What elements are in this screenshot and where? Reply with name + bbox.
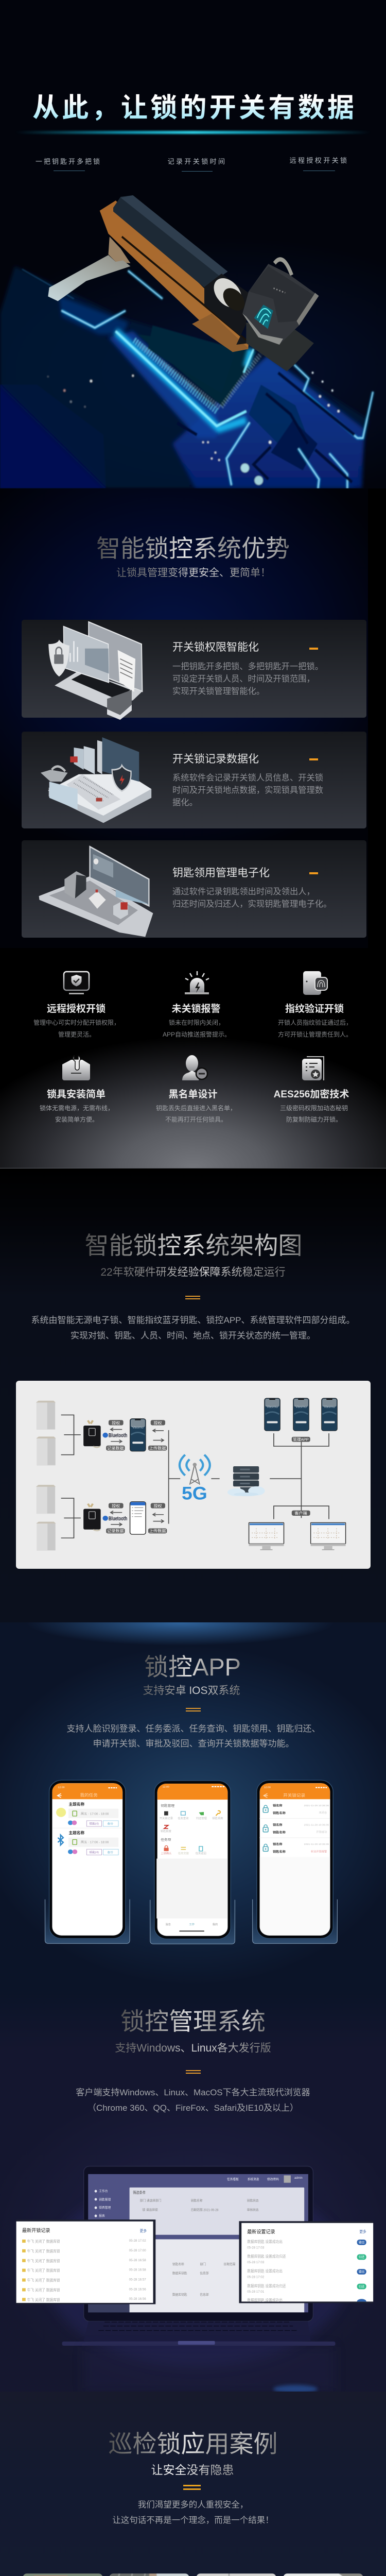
- card: latest settings records: 输出: [359, 2270, 364, 2274]
- phone: lock records: 钥匙名称: [273, 1831, 286, 1834]
- photo: Zhengzhou railway fence: [110, 2573, 189, 2576]
- upload link 1: [148, 1420, 167, 1451]
- feature title 2: 未关锁报警: [171, 1004, 221, 1014]
- bracket lines: [61, 1415, 329, 1538]
- phone: my tasks: 周五 · 17:00 - 18:00: [81, 1812, 109, 1816]
- card description: [172, 773, 323, 807]
- upload link 2: 上传数据: [149, 1528, 166, 1533]
- card: latest unlock records: [16, 2219, 155, 2304]
- phone: workbench: 钥匙管理: [161, 1803, 175, 1808]
- phone: lock records: 2021-11-29 10:36:36: [304, 1804, 329, 1807]
- cases description: 我们渴望更多的人重视安全，: [138, 2500, 248, 2510]
- icon: toolbox with wrench: [62, 1056, 90, 1080]
- phone: lock records: 2021-11-29 10:36:36: [304, 1843, 329, 1846]
- architecture description: 系统由智能无源电子锁、智能指纹蓝牙钥匙、锁控APP、系统管理软件四部分组成。: [31, 1315, 355, 1325]
- phone: my tasks: 12:00: [58, 1786, 65, 1789]
- card description: 系统软件会记录开关锁人员信息、开关锁: [172, 773, 323, 783]
- app phone 2: [130, 1502, 146, 1534]
- feature text 2: [163, 1019, 231, 1038]
- feature text 2: 锁未在时限内关闭，: [169, 1019, 224, 1026]
- phone: my tasks: 周五 · 17:00 - 18:00: [81, 1841, 109, 1844]
- phone: workbench: 任务返回: [196, 1852, 206, 1855]
- hero title: 从此，让锁的开关有数据: [32, 93, 357, 123]
- feature text 4: [40, 1105, 114, 1123]
- architecture diagram: [36, 1398, 346, 1551]
- icon: monitor with shield: [64, 972, 89, 994]
- section subtitle: advantages: 让锁具管理变得更安全、更简单！: [116, 567, 271, 579]
- bluetooth link 1: 记录数据: [107, 1446, 124, 1450]
- phone: my tasks: 备份: [108, 1850, 113, 1854]
- phone: workbench: 12:00: [163, 1786, 169, 1789]
- phone: lock records: 2021-11-29 10:36:36: [304, 1823, 329, 1826]
- card description: 通过软件记录钥匙领出时间及领出人，: [172, 887, 315, 896]
- card: latest unlock records: 05-28 17:00: [129, 2249, 146, 2252]
- hero glow divider: [15, 131, 371, 134]
- fingerprint bluetooth key: [242, 259, 319, 371]
- bluetooth link 2: Bluetooth: [109, 1516, 127, 1522]
- card: latest unlock records: 牛飞 关闭了 数据库锁: [27, 2297, 60, 2302]
- section subtitle: app: 支持安卓 IOS双系统: [143, 1685, 240, 1697]
- feature text 6: [280, 1105, 348, 1123]
- feature label 3: 远程授权开关锁: [290, 157, 348, 164]
- card: latest settings records: 05-28 17:03: [247, 2261, 265, 2264]
- card: latest settings records: 最新设置记录: [247, 2229, 275, 2234]
- illustration: laptop with shield: [48, 622, 142, 720]
- card: record digitisation: [22, 732, 366, 828]
- card description: 可设定开关锁人员、时间及开锁范围，: [172, 674, 315, 684]
- management system mockup: [16, 2166, 374, 2392]
- orange double rule: [183, 2485, 201, 2490]
- laptop: 报表: [99, 2214, 105, 2218]
- phone: workbench: 钥匙报废: [161, 1829, 171, 1833]
- phone: workbench: 归还管理: [196, 1817, 207, 1820]
- phone: workbench: 工作: [189, 1923, 195, 1926]
- phone: my tasks: 钥匙(4): [89, 1850, 99, 1854]
- section subtitle: management system: 支持Windows、Linux各大发行版: [115, 2042, 271, 2054]
- laptop: 工作台: [99, 2189, 108, 2193]
- dots: [47, 371, 340, 461]
- card description: [172, 887, 331, 909]
- card: latest unlock records: 05-28 17:02: [129, 2239, 146, 2243]
- section title: app: 锁控APP: [144, 1653, 241, 1681]
- card: latest settings records: 05-28 17:03: [247, 2246, 265, 2249]
- feature text 1: [33, 1019, 120, 1038]
- icon: certificate document: [302, 1057, 324, 1080]
- upload link 1: 授权: [153, 1420, 162, 1425]
- feature title 4: 锁具安装简单: [47, 1089, 106, 1100]
- cabinets group 2: [36, 1485, 56, 1551]
- phone: lock records: 未闭合: [319, 1811, 327, 1815]
- bluetooth link 1: Bluetooth: [109, 1433, 127, 1439]
- chip pins: [134, 340, 261, 408]
- panel: system advantages background: [0, 488, 386, 948]
- card: latest unlock records: 05-28 16:57: [129, 2278, 146, 2282]
- phone: lock records: 开关锁记录: [283, 1793, 305, 1798]
- laptop: 系统消息: [248, 2177, 259, 2181]
- card description: 时间及开关锁地点数据，实现锁具管理数: [172, 786, 323, 795]
- phone: workbench: 我的: [213, 1923, 218, 1926]
- phone: lock records: [253, 1780, 337, 1943]
- card: latest unlock records: 牛飞 关闭了 数据库锁: [27, 2249, 60, 2253]
- phone: my tasks: 主题名称: [68, 1802, 85, 1806]
- photo: Wuhan street lamp cabinet: [23, 2573, 102, 2576]
- architecture description: [31, 1315, 355, 1341]
- laptop: 修改密码: [267, 2177, 279, 2181]
- phone: lock records: 12:00: [264, 1786, 271, 1789]
- architecture diagram panel: [16, 1381, 371, 1569]
- card: latest settings records: [239, 2221, 373, 2303]
- card: latest unlock records: 牛飞 关闭了 数据库锁: [27, 2287, 60, 2293]
- glow lines: [116, 331, 251, 429]
- label: manage app: 管理APP: [293, 1437, 309, 1442]
- accent dash: [309, 648, 318, 650]
- card: latest unlock records: 牛飞 关闭了 数据库锁: [27, 2239, 60, 2244]
- card: latest settings records: 更多: [359, 2229, 366, 2234]
- 5G tower: 5G: [182, 1483, 207, 1503]
- panel: app background: [0, 1622, 386, 1993]
- feature text 3: [278, 1019, 352, 1038]
- section title: architecture: 智能锁控系统架构图: [84, 1232, 303, 1259]
- bluetooth link 2: [102, 1503, 127, 1533]
- client monitors: [249, 1522, 346, 1550]
- section background: hero: [0, 0, 386, 488]
- laptop: 部门: [200, 2262, 206, 2266]
- app description: 申请开关锁、审批及驳回、查询开关锁数据等功能。: [93, 1739, 294, 1749]
- section subtitle: architecture: 22年软硬件研发经验保障系统稳定运行: [100, 1266, 286, 1278]
- laptop: admin: [294, 2177, 303, 2180]
- laptop: 部门 请选择部门: [140, 2198, 161, 2203]
- feature title 6: AES256加密技术: [274, 1089, 349, 1100]
- section subtitle: cases: 让安全没有隐患: [151, 2463, 234, 2477]
- circuit board: [0, 266, 373, 488]
- card: key management: [22, 840, 366, 938]
- accent dash: [309, 758, 318, 760]
- card: latest settings records: 05-28 17:01: [247, 2290, 265, 2294]
- feature title 5: 黑名单设计: [168, 1089, 218, 1100]
- cabinets group 1: [36, 1401, 56, 1466]
- laptop: [44, 2166, 349, 2393]
- cloud server: [227, 1466, 265, 1496]
- management description: 客户端支持Windows、Linux、MacOS下各大主流现代浏览器: [76, 2088, 310, 2097]
- card: latest unlock records: 更多: [140, 2228, 147, 2233]
- management phones: [265, 1398, 337, 1431]
- upload link 1: 上传数据: [149, 1446, 166, 1450]
- bluetooth link 2: 授权: [112, 1503, 120, 1508]
- phone: workbench: 开关锁记录: [160, 1817, 173, 1820]
- card: latest unlock records: 05-28 16:58: [129, 2268, 146, 2272]
- card description: 实现开关锁管理智能化。: [172, 687, 265, 696]
- illustration: desk with shield and keyboard: [41, 737, 151, 823]
- card: latest unlock records: 05-28 16:56: [129, 2287, 146, 2291]
- card: latest settings records: 数据库钥匙 设置成功归还: [247, 2254, 286, 2259]
- section title: management system: 锁控管理系统: [120, 2008, 266, 2035]
- phone: lock records: 锁名称: [273, 1823, 283, 1827]
- phone: my tasks: 备份: [108, 1822, 113, 1825]
- phone: my tasks: 我的任务: [80, 1792, 98, 1798]
- card: latest unlock records: 牛飞 关闭了 数据库锁: [27, 2268, 60, 2273]
- phone: my tasks: 钥匙(4): [89, 1822, 99, 1825]
- accent dash: [309, 872, 318, 874]
- illustration: server and dashboard: [39, 846, 153, 937]
- feature text 4: 安装简单方便。: [55, 1116, 98, 1123]
- card: latest settings records: 输出: [359, 2240, 364, 2245]
- app phone 1: [130, 1419, 146, 1451]
- feature title 3: 指纹验证开锁: [285, 1004, 344, 1014]
- feature text 3: 开锁人员指纹验证通过后，: [278, 1019, 352, 1026]
- laptop: 数据库钥匙: [172, 2293, 187, 2297]
- bluetooth link 1: 授权: [112, 1420, 120, 1425]
- orange double rule: [185, 1296, 200, 1299]
- laptop: 任务看板: [227, 2177, 239, 2181]
- app description: [67, 1724, 320, 1749]
- orange double rule: [186, 2070, 201, 2074]
- feature text 6: 防复制防磁力开锁。: [286, 1116, 342, 1123]
- laptop: 日期范围 2021-05-28: [191, 2208, 219, 2212]
- feature text 3: 方可开锁让管理责任到人。: [278, 1031, 352, 1038]
- laptop: 数据库钥匙: [172, 2271, 187, 2275]
- laptop: 日期范围: [223, 2262, 235, 2266]
- laptop: 信息部: [200, 2271, 209, 2275]
- app phones: [45, 1780, 338, 1944]
- feature text 2: APP自动推送报警提示。: [163, 1031, 231, 1038]
- card: latest settings records: 数据库钥匙 设置成功出: [247, 2268, 283, 2274]
- phone: lock records: 锁名称: [273, 1842, 283, 1846]
- card: latest settings records: 数据库钥匙 设置成功出: [247, 2298, 283, 2302]
- card description: 归还时间及归还人，实现钥匙管理电子化。: [172, 900, 331, 909]
- smart lock handle: [48, 195, 249, 352]
- feature text 4: 锁体无需电源，无需布线，: [40, 1105, 114, 1112]
- phone: workbench: 任务查询: [178, 1817, 188, 1820]
- icon: fingerprint door: [303, 971, 327, 995]
- label: client: 客户端: [294, 1511, 307, 1516]
- feature text 6: 三级密码权限加动态秘钥: [280, 1105, 348, 1112]
- phone: lock records: 非法开锁报警: [311, 1850, 327, 1853]
- upload link 2: 授权: [153, 1503, 162, 1508]
- phone: lock records: 锁名称: [273, 1804, 283, 1808]
- section title: advantages: 智能锁控系统优势: [96, 535, 290, 562]
- laptop: 信息部: [200, 2293, 209, 2297]
- cases description: 让这句话不再是一个理念，而是一个结果！: [112, 2516, 274, 2525]
- photo: West-East gas pipeline: [197, 2573, 276, 2576]
- card: latest settings records: 05-28 17:02: [247, 2275, 265, 2279]
- laptop: 锁 请选择锁: [142, 2208, 158, 2212]
- card: latest settings records: 数据库钥匙 设置成功归还: [247, 2283, 286, 2288]
- orange double rule: [186, 1708, 201, 1711]
- section title: cases: 巡检锁应用案例: [108, 2430, 278, 2458]
- laptop: 钥匙管理: [99, 2197, 111, 2201]
- feature label 1: 一把钥匙开多把锁: [36, 158, 101, 165]
- phone: lock records: 钥匙名称: [273, 1850, 286, 1854]
- hero illustration: circuit board and smart lock: [0, 195, 375, 488]
- feature label 2: 记录开关锁时间: [168, 158, 226, 165]
- cases description: [112, 2500, 274, 2525]
- panel: cases background: [0, 2392, 386, 2576]
- feature icons: [62, 971, 328, 1080]
- laptop: 钥匙状态: [247, 2198, 259, 2203]
- phone: workbench: 消息: [165, 1923, 171, 1926]
- management description: （Chrome 360、QQ、FireFox、Safari及IE10及以上）: [87, 2103, 299, 2113]
- card description: [172, 662, 323, 696]
- dark traces: [177, 372, 355, 482]
- panel: architecture background: [0, 1168, 386, 1622]
- icon: person with minus: [182, 1055, 207, 1080]
- card: latest unlock records: 最新开锁记录: [22, 2227, 50, 2233]
- feature text 5: 不能再打开任何锁具。: [165, 1116, 227, 1123]
- app description: 支持人脸识别登录、任务委派、任务查询、钥匙领用、钥匙归还、: [67, 1724, 320, 1734]
- label: client: [292, 1511, 310, 1516]
- feature title 1: 远程授权开锁: [47, 1004, 106, 1014]
- phone: workbench: 任务项: [161, 1837, 171, 1842]
- phone: my tasks: [45, 1780, 130, 1943]
- phone: lock records: 开锁成功: [316, 1831, 327, 1834]
- feature text 1: 管理中心可实时分配开锁权限，: [33, 1019, 120, 1026]
- card title: 开关锁权限智能化: [172, 641, 259, 653]
- bluetooth link 2: 记录数据: [107, 1528, 124, 1533]
- bluetooth key 2: [83, 1504, 101, 1531]
- bluetooth link 1: [102, 1420, 127, 1451]
- card description: 据化。: [172, 798, 198, 807]
- card: latest settings records: 数据库钥匙 设置成功出: [247, 2239, 283, 2244]
- card: permission intelligence: [22, 620, 366, 718]
- card: latest settings records: 归还: [359, 2255, 364, 2259]
- upload link 2: [148, 1503, 167, 1533]
- laptop: 钥匙名称: [191, 2198, 203, 2203]
- phone: lock records: 钥匙名称: [273, 1811, 286, 1815]
- photo: State Grid Dalian substation: [284, 2573, 363, 2576]
- 5G tower: [180, 1455, 210, 1503]
- laptop: 钥匙名称: [172, 2262, 184, 2266]
- panel: feature grid background: [0, 948, 386, 1168]
- card illustrations: [39, 621, 153, 937]
- feature text 5: 钥匙丢失后直接进入黑名单，: [156, 1105, 236, 1112]
- laptop: 锁具管理: [99, 2206, 111, 2210]
- phone: my tasks: 主题名称: [68, 1831, 85, 1835]
- laptop: 审核状态: [247, 2208, 259, 2212]
- icon: alarm beacon: [185, 971, 209, 994]
- card title: 开关锁记录数据化: [172, 753, 259, 765]
- card: latest settings records: 归还: [359, 2284, 364, 2289]
- panel: management system background: [0, 1993, 386, 2392]
- card: latest unlock records: 05-28 16:56: [129, 2297, 146, 2301]
- feature text 5: [156, 1105, 236, 1123]
- card: latest unlock records: 牛飞 关闭了 数据库锁: [27, 2259, 60, 2263]
- label underlines: [54, 171, 335, 172]
- architecture description: 实现对锁、钥匙、人员、时间、地点、锁开关状态的统一管理。: [71, 1331, 315, 1341]
- bluetooth key 1: [83, 1420, 101, 1447]
- feature text 1: 管理更灵活。: [58, 1031, 95, 1038]
- card: latest unlock records: 05-28 16:58: [129, 2259, 146, 2262]
- laptop: 筛选条件: [133, 2190, 146, 2195]
- management description: [76, 2088, 310, 2113]
- phone: workbench: 上锁确认: [161, 1852, 171, 1855]
- phone: workbench: 任务交接: [178, 1852, 189, 1855]
- card title: 钥匙领用管理电子化: [172, 867, 270, 879]
- phone: workbench: [150, 1781, 235, 1944]
- card: latest unlock records: 牛飞 关闭了 数据库锁: [27, 2278, 60, 2283]
- phone: workbench: 钥匙领用: [212, 1817, 223, 1820]
- card description: 一把钥匙开多把锁、多把钥匙开一把锁。: [172, 662, 323, 671]
